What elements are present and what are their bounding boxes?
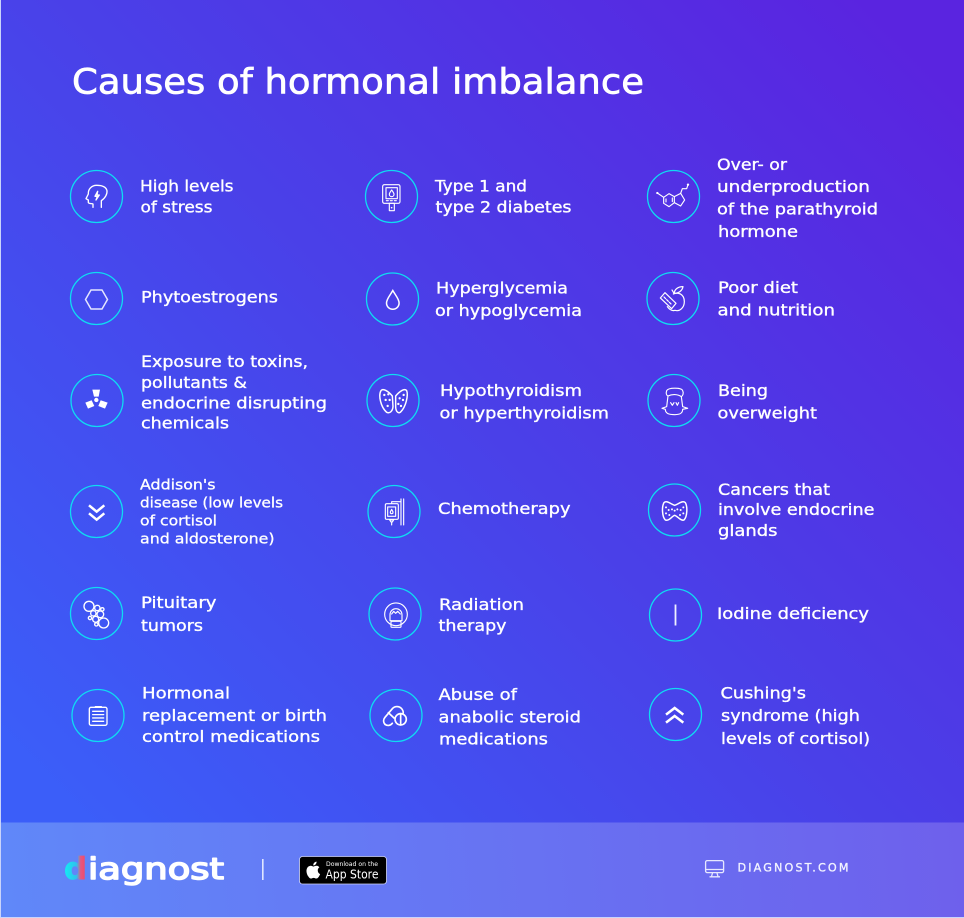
item: addison's disease: of cortisol: [140, 512, 217, 529]
item: poor diet: and nutrition: [718, 301, 835, 320]
item: hormonal replacement: replacement or birth: [142, 706, 327, 725]
item: exposure to toxins: [71, 352, 327, 433]
item: cushing's syndrome: levels of cortisol): [721, 729, 870, 748]
logo: diagnost: d: [64, 852, 87, 887]
item: anabolic steroids: [370, 685, 581, 749]
item: exposure to toxins: Exposure to toxins,: [141, 352, 308, 371]
icon: scanner: [385, 603, 407, 627]
item: diabetes: Type 1 and: [434, 176, 527, 195]
icon: head with lightning bolt: [86, 185, 107, 207]
icon: double chevron down: [89, 505, 104, 520]
item: poor diet: Poor diet: [718, 278, 798, 297]
item: thyroid disorders: Hypothyroidism: [440, 381, 582, 400]
footer band: [0, 822, 964, 918]
item: pituitary tumors: Pituitary: [141, 593, 216, 612]
item: cushing's syndrome: syndrome (high: [721, 706, 860, 725]
app store badge: App Store: [326, 868, 378, 882]
item: hyperglycemia: Hyperglycemia: [436, 278, 568, 297]
item: chemotherapy: [368, 486, 570, 538]
item: hormonal replacement: Hormonal: [142, 684, 230, 703]
item: diabetes: type 2 diabetes: [436, 198, 572, 217]
logo: diagnost: [64, 852, 224, 887]
item: anabolic steroids: anabolic steroid: [438, 708, 581, 727]
divider: [262, 859, 264, 880]
app store badge: Download on the: [326, 861, 378, 868]
icon: butterfly gland: [662, 502, 687, 520]
website url: DIAGNOST.COM: [738, 862, 848, 875]
icon: letter I bar: [675, 604, 676, 626]
icon: apple with measuring tape: [660, 287, 684, 311]
icon: cluster of bubbles: [84, 601, 109, 628]
item: parathyroid hormone: underproduction: [717, 177, 870, 196]
item: being overweight: [648, 374, 817, 426]
item: exposure to toxins: chemicals: [141, 414, 229, 433]
title: Causes of hormonal imbalance: [72, 62, 644, 102]
item: radiation therapy: therapy: [438, 616, 506, 635]
item: endocrine cancers: glands: [718, 521, 778, 540]
item: anabolic steroids: medications: [439, 730, 548, 749]
item: pituitary tumors: [70, 588, 216, 640]
item: addison's disease: Addison's: [140, 476, 216, 493]
icon: molecule: [656, 183, 689, 207]
app store badge: [300, 856, 386, 884]
item: anabolic steroids: Abuse of: [438, 685, 517, 704]
icon: apple logo: [306, 862, 320, 879]
item: addison's disease: [70, 476, 283, 547]
icon: glucose meter: [383, 185, 400, 211]
item: high levels of stress: of stress: [140, 198, 212, 217]
item: iodine deficiency: [650, 589, 869, 641]
item: poor diet: [647, 272, 835, 324]
item: parathyroid hormone: [648, 155, 878, 241]
item: being overweight: overweight: [718, 404, 817, 423]
item: exposure to toxins: endocrine disrupting: [141, 394, 327, 412]
item: pituitary tumors: tumors: [141, 616, 203, 635]
item: thyroid disorders: [367, 374, 609, 426]
icon: iv bag: [385, 499, 404, 525]
item: thyroid disorders: or hyperthyroidism: [440, 404, 609, 423]
item: endocrine cancers: [648, 480, 874, 540]
icon: double chevron up: [666, 708, 683, 723]
item: diabetes: [366, 170, 572, 222]
item: high levels of stress: [70, 170, 234, 222]
icon: thyroid gland: [380, 390, 407, 413]
item: phytoestrogens: [70, 272, 278, 324]
logo: diagnost: iagnost: [88, 852, 224, 886]
item: parathyroid hormone: of the parathyroid: [717, 200, 878, 219]
item: addison's disease: disease (low levels: [140, 494, 283, 511]
item: hormonal replacement: control medications: [142, 727, 320, 746]
item: addison's disease: and aldosterone): [140, 530, 274, 547]
icon: drop: [386, 290, 399, 309]
item: high levels of stress: High levels: [140, 176, 234, 196]
icon: overweight person: [662, 388, 688, 415]
item: hyperglycemia: or hypoglycemia: [435, 301, 582, 320]
icon: clipboard: [89, 707, 107, 725]
icon: radiation symbol: [85, 390, 108, 409]
item: radiation therapy: [369, 588, 524, 640]
item: iodine deficiency: Iodine deficiency: [717, 604, 869, 623]
item: being overweight: Being: [718, 381, 768, 400]
item: cushing's syndrome: [650, 684, 870, 748]
item: exposure to toxins: pollutants &: [141, 373, 247, 392]
icon: monitor: [706, 861, 724, 877]
item: hyperglycemia: [366, 273, 582, 325]
item: phytoestrogens: Phytoestrogens: [141, 288, 278, 306]
item: parathyroid hormone: hormone: [718, 222, 798, 241]
item: endocrine cancers: Cancers that: [718, 480, 830, 499]
icon: hexagon: [86, 290, 108, 309]
item: cushing's syndrome: Cushing's: [720, 684, 806, 703]
item: parathyroid hormone: Over- or: [717, 155, 787, 174]
item: endocrine cancers: involve endocrine: [718, 500, 874, 519]
icon: pills: [384, 707, 406, 725]
item: radiation therapy: Radiation: [439, 595, 524, 614]
item: hormonal replacement: [72, 684, 327, 746]
item: chemotherapy: Chemotherapy: [438, 499, 570, 518]
